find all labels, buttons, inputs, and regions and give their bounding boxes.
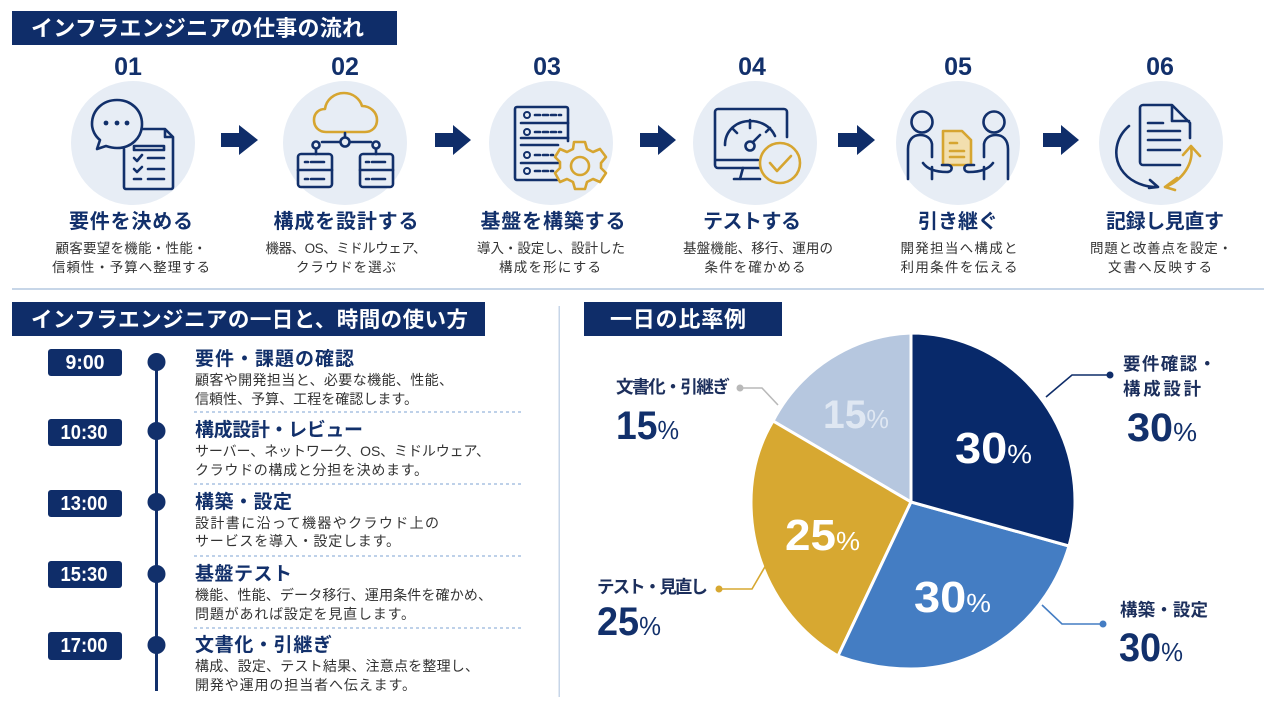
callout: build and configure xyxy=(1042,600,1208,670)
timeline row 9:00: 信頼性、予算、工程を確認します。 xyxy=(195,391,418,407)
timeline row 9:00: 9:00 xyxy=(66,352,104,374)
step 03: build: 03 xyxy=(533,53,561,81)
step 05: handover: 開発担当へ構成と xyxy=(900,241,1018,256)
timeline row 15:30: 機能、性能、データ移行、運用条件を確かめ、 xyxy=(195,587,492,603)
step 03: build: 構成を形にする xyxy=(499,260,601,275)
icon: two people exchanging a document xyxy=(908,112,1008,179)
timeline row 15:30 xyxy=(48,561,492,622)
step 02: design: クラウドを選ぶ xyxy=(296,260,396,275)
arrow 5 xyxy=(1043,125,1079,155)
heading: workflow: インフラエンジニアの仕事の流れ xyxy=(31,16,364,41)
step 01: requirements: 要件を決める xyxy=(69,210,193,233)
step 06: review: 問題と改善点を設定・ xyxy=(1090,240,1232,256)
timeline row 10:30 xyxy=(48,418,490,478)
heading: workflow xyxy=(12,11,397,45)
pie value labels: 30% xyxy=(955,424,1032,473)
callout: documents and handover xyxy=(616,377,778,448)
step 03: build: 導入・設定し、設計した xyxy=(477,241,625,256)
step 06: review: 記録し見直す xyxy=(1106,210,1224,233)
callout: build and configure: 構築・設定 xyxy=(1120,600,1208,620)
timeline row 9:00 xyxy=(48,348,453,407)
pie value labels xyxy=(785,393,1032,622)
step 01: requirements: 01 xyxy=(114,53,142,81)
timeline row 13:00 xyxy=(48,490,439,549)
timeline row 15:30: 基盤テスト xyxy=(195,563,292,585)
callout: test and review xyxy=(597,565,766,644)
icon: server rack and gear xyxy=(515,107,606,189)
callout: documents and handover: 15% xyxy=(616,404,679,448)
timeline row 9:00: 顧客や開発担当と、必要な機能、性能、 xyxy=(195,372,453,388)
timeline row 15:30: 問題があれば設定を見直します。 xyxy=(195,606,415,622)
arrow 4 xyxy=(838,125,875,155)
step 01: requirements xyxy=(52,53,210,275)
pie chart xyxy=(751,333,1075,669)
timeline row 9:00: 要件・課題の確認 xyxy=(195,348,354,370)
step 01: requirements: 顧客要望を機能・性能・ xyxy=(56,240,206,256)
callout: requirements and design: 要件確認・ xyxy=(1123,354,1216,374)
arrow 2 xyxy=(435,125,471,155)
step 04: test: テストする xyxy=(703,211,801,233)
timeline spine xyxy=(155,362,158,691)
callout: requirements and design xyxy=(1046,354,1216,450)
pie value labels: 30% xyxy=(914,573,991,622)
icon: speech bubble and checklist xyxy=(92,100,173,189)
step 05: handover: 利用条件を伝える xyxy=(900,259,1018,275)
pie value labels: 15% xyxy=(823,393,889,437)
arrow 1 xyxy=(221,125,258,155)
timeline row 17:00: 構成、設定、テスト結果、注意点を整理し、 xyxy=(195,658,479,674)
step 03: build xyxy=(477,53,626,275)
step 04: test: 04 xyxy=(738,53,766,81)
timeline row 17:00: 開発や運用の担当者へ伝えます。 xyxy=(195,677,416,693)
step 06: review xyxy=(1090,53,1232,275)
callout: requirements and design: 30% xyxy=(1127,406,1197,450)
timeline row 13:00: サービスを導入・設定します。 xyxy=(195,533,400,549)
callout: build and configure: 30% xyxy=(1119,626,1183,670)
step 06: review: 06 xyxy=(1146,53,1174,81)
timeline row 15:30: 15:30 xyxy=(60,564,108,586)
icon: monitor, gauge and check xyxy=(715,109,800,183)
step 05: handover: 05 xyxy=(944,53,972,81)
step 06: review: 文書へ反映する xyxy=(1108,260,1212,275)
icon: cloud and servers xyxy=(298,93,393,187)
pie value labels: 25% xyxy=(785,511,860,560)
step 05: handover: 引き継ぐ xyxy=(918,210,998,233)
step 02: design xyxy=(266,53,426,275)
timeline row 13:00: 13:00 xyxy=(60,493,108,515)
heading: ratio xyxy=(584,302,782,336)
step 04: test: 条件を確かめる xyxy=(704,259,806,275)
timeline row 17:00 xyxy=(48,632,479,693)
icon: document and cycle arrows xyxy=(1116,105,1200,190)
timeline row 10:30: 構成設計・レビュー xyxy=(195,418,363,441)
step 05: handover xyxy=(896,53,1020,275)
timeline row 13:00: 構築・設定 xyxy=(195,490,292,513)
step 02: design: 02 xyxy=(331,53,359,81)
step 03: build: 基盤を構築する xyxy=(480,210,626,233)
timeline row 17:00: 文書化・引継ぎ xyxy=(195,633,332,656)
timeline row 10:30: 10:30 xyxy=(60,422,108,444)
timeline row 17:00: 17:00 xyxy=(60,635,108,657)
callout: documents and handover: 文書化・引継ぎ xyxy=(616,377,730,397)
step 01: requirements: 信頼性・予算へ整理する xyxy=(52,260,210,275)
timeline row 10:30: サーバー、ネットワーク、OS、ミドルウェア、 xyxy=(195,443,490,459)
callout: test and review: テスト・見直し xyxy=(597,577,708,597)
timeline row 13:00: 設計書に沿って機器やクラウド上の xyxy=(195,515,439,531)
callout: test and review: 25% xyxy=(597,600,661,644)
heading: a day: インフラエンジニアの一日と、時間の使い方 xyxy=(31,308,468,332)
callout: requirements and design: 構成設計 xyxy=(1123,379,1202,399)
step 02: design: 機器、OS、ミドルウェア、 xyxy=(266,241,426,256)
step 04: test: 基盤機能、移行、運用の xyxy=(683,240,833,256)
step 04: test xyxy=(683,53,833,275)
heading: a day xyxy=(12,302,485,336)
arrow 3 xyxy=(640,125,676,155)
step 02: design: 構成を設計する xyxy=(274,209,418,233)
heading: ratio: 一日の比率例 xyxy=(610,307,746,332)
timeline row 10:30: クラウドの構成と分担を決めます。 xyxy=(195,462,428,478)
